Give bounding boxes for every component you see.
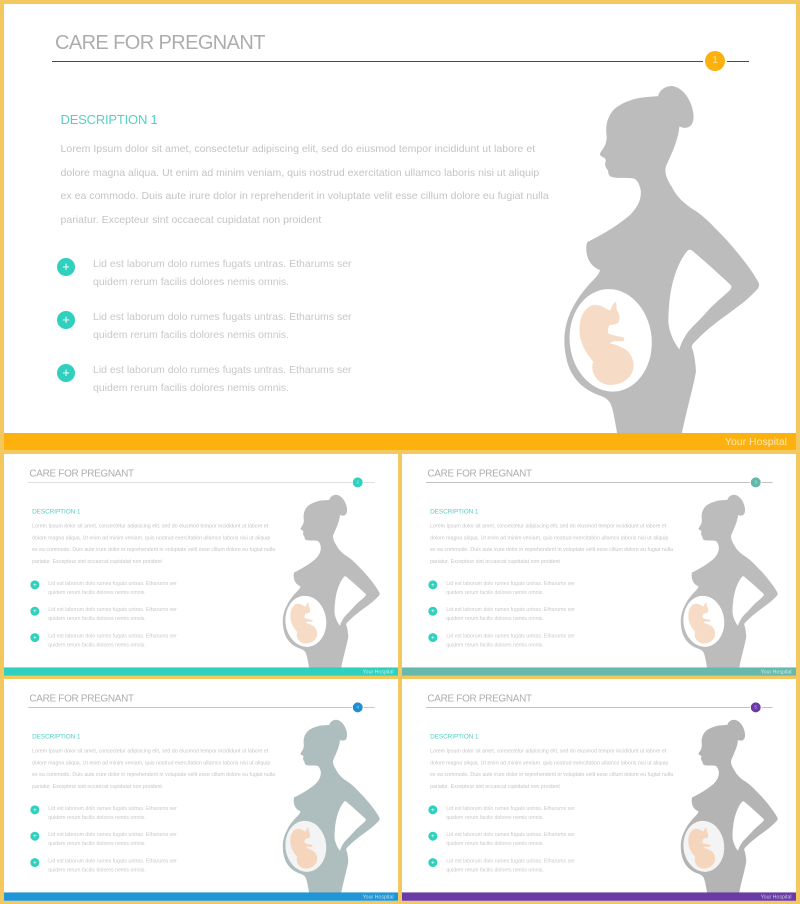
bullet text 3: Lid est laborum dolo rumes fugats untras. Etharums ser <box>93 364 352 376</box>
pregnant silhouette with fetus <box>282 720 380 892</box>
bullet text 2 <box>93 311 352 341</box>
icon: bullet 1: + <box>62 259 70 274</box>
heading: description: DESCRIPTION 1 <box>430 733 478 740</box>
title: CARE FOR PREGNANT <box>55 32 265 54</box>
icon: bullet 1 <box>428 580 437 589</box>
bullet text 2: quidem rerum facilis dolores nemis omnis. <box>48 616 146 622</box>
bullet text 2: Lid est laborum dolo rumes fugats untras. Etharums ser <box>446 832 575 838</box>
panel: sage green theme <box>402 454 796 676</box>
panel: teal theme <box>4 454 398 676</box>
panel: purple theme <box>402 679 796 901</box>
footer bar <box>4 667 398 676</box>
bullet text 3 <box>446 858 575 873</box>
icon: bullet 3 <box>428 858 437 867</box>
bullet text 2 <box>446 607 575 622</box>
icon: bullet 2: + <box>62 312 70 327</box>
bullet text 1 <box>446 580 575 595</box>
bullet text 1: quidem rerum facilis dolores nemis omnis. <box>48 814 146 820</box>
icon: bullet 2 <box>30 607 39 616</box>
title: CARE FOR PREGNANT <box>427 468 532 479</box>
icon: bullet 1 <box>428 805 437 814</box>
footer bar: Your Hospital <box>761 669 792 675</box>
body paragraph: ex ea commodo. Duis aute irure dolor in reprehenderit in voluptate velit esse cillum dolore eu fugiat nulla <box>32 547 275 553</box>
icon: bullet 2 <box>57 311 75 329</box>
footer bar <box>4 892 398 901</box>
body paragraph: Lorem Ipsum dolor sit amet, consectetur adipiscing elit, sed do eiusmod tempor incididunt ut labore et <box>60 143 535 155</box>
number badge <box>703 49 727 73</box>
bullet text 1: quidem rerum facilis dolores nemis omnis. <box>48 589 146 595</box>
bullet text 3: quidem rerum facilis dolores nemis omnis. <box>93 382 289 394</box>
body paragraph: Lorem Ipsum dolor sit amet, consectetur adipiscing elit, sed do eiusmod tempor incididunt ut labore et <box>32 523 268 529</box>
icon: bullet 2 <box>428 832 437 841</box>
pregnant silhouette with fetus <box>680 494 778 668</box>
number badge: 2 <box>356 479 359 485</box>
body paragraph: dolore magna aliqua. Ut enim ad minim veniam, quis nostrud exercitation ullamco laboris nisi ut aliquip <box>32 535 270 541</box>
bullet text 3: quidem rerum facilis dolores nemis omnis. <box>48 867 146 873</box>
number badge <box>750 476 762 488</box>
icon: bullet 3: + <box>33 634 37 641</box>
body paragraph: pariatur. Excepteur sint occaecat cupidatat non proident <box>430 559 560 564</box>
body paragraph: dolore magna aliqua. Ut enim ad minim veniam, quis nostrud exercitation ullamco laboris nisi ut aliquip <box>430 760 668 766</box>
number badge: 3 <box>754 479 757 485</box>
icon: bullet 1: + <box>33 806 37 813</box>
icon: bullet 3: + <box>431 859 435 866</box>
body paragraph: pariatur. Excepteur sint occaecat cupidatat non proident <box>32 784 162 789</box>
icon: bullet 2: + <box>33 832 37 840</box>
bullet text 2: Lid est laborum dolo rumes fugats untras. Etharums ser <box>93 311 352 323</box>
body paragraph: pariatur. Excepteur sint occaecat cupidatat non proident <box>430 784 560 789</box>
body paragraph: dolore magna aliqua. Ut enim ad minim veniam, quis nostrud exercitation ullamco laboris nisi ut aliquip <box>430 535 668 541</box>
header rule <box>426 481 773 484</box>
number badge: 5 <box>754 704 757 710</box>
bullet text 2 <box>48 832 177 847</box>
body paragraph: ex ea commodo. Duis aute irure dolor in reprehenderit in voluptate velit esse cillum dolore eu fugiat nulla <box>60 190 549 202</box>
body paragraph: ex ea commodo. Duis aute irure dolor in reprehenderit in voluptate velit esse cillum dolore eu fugiat nulla <box>430 772 673 778</box>
title: CARE FOR PREGNANT <box>29 468 134 479</box>
number badge <box>352 701 364 713</box>
bullet text 3: Lid est laborum dolo rumes fugats untras. Etharums ser <box>48 858 177 864</box>
icon: bullet 1 <box>30 805 39 814</box>
bullet text 1 <box>48 580 177 595</box>
bullet text 1: quidem rerum facilis dolores nemis omnis. <box>446 814 544 820</box>
bullet text 3 <box>48 633 177 648</box>
bullet text 3 <box>446 633 575 648</box>
header rule <box>28 481 375 484</box>
footer bar: Your Hospital <box>363 669 394 675</box>
bullet text 3: Lid est laborum dolo rumes fugats untras. Etharums ser <box>446 858 575 864</box>
footer bar <box>402 892 796 901</box>
footer bar <box>4 433 796 450</box>
panel: main slide, orange theme <box>4 4 796 450</box>
icon: bullet 2: + <box>431 832 435 840</box>
icon: bullet 1: + <box>33 581 37 588</box>
bullet text 1: quidem rerum facilis dolores nemis omnis. <box>446 589 544 595</box>
heading: description: DESCRIPTION 1 <box>60 112 158 127</box>
bullet text 1: Lid est laborum dolo rumes fugats untras. Etharums ser <box>48 580 177 586</box>
bullet text 2: quidem rerum facilis dolores nemis omnis. <box>48 841 146 847</box>
icon: bullet 3: + <box>431 634 435 641</box>
body paragraph: ex ea commodo. Duis aute irure dolor in reprehenderit in voluptate velit esse cillum dolore eu fugiat nulla <box>32 772 275 778</box>
bullet text 1 <box>93 258 352 288</box>
number badge <box>750 701 762 713</box>
body paragraph <box>32 523 275 564</box>
body paragraph: ex ea commodo. Duis aute irure dolor in reprehenderit in voluptate velit esse cillum dolore eu fugiat nulla <box>430 547 673 553</box>
bullet text 1: Lid est laborum dolo rumes fugats untras. Etharums ser <box>446 805 575 811</box>
bullet text 2: Lid est laborum dolo rumes fugats untras. Etharums ser <box>48 607 177 613</box>
bullet text 2: quidem rerum facilis dolores nemis omnis. <box>446 841 544 847</box>
icon: bullet 1: + <box>431 581 435 588</box>
bullet text 1 <box>446 805 575 820</box>
body paragraph: dolore magna aliqua. Ut enim ad minim veniam, quis nostrud exercitation ullamco laboris nisi ut aliquip <box>32 760 270 766</box>
bullet text 2: Lid est laborum dolo rumes fugats untras. Etharums ser <box>446 607 575 613</box>
bullet text 3: quidem rerum facilis dolores nemis omnis. <box>48 642 146 648</box>
body paragraph <box>430 523 673 564</box>
body paragraph <box>430 748 673 789</box>
body paragraph: Lorem Ipsum dolor sit amet, consectetur adipiscing elit, sed do eiusmod tempor incididunt ut labore et <box>430 523 666 529</box>
bullet text 1: quidem rerum facilis dolores nemis omnis. <box>93 276 289 288</box>
title: CARE FOR PREGNANT <box>29 693 134 704</box>
bullet text 2 <box>446 832 575 847</box>
icon: bullet 3: + <box>33 859 37 866</box>
bullet text 2: quidem rerum facilis dolores nemis omnis. <box>446 616 544 622</box>
body paragraph: pariatur. Excepteur sint occaecat cupidatat non proident <box>60 214 321 226</box>
bullet text 2 <box>48 607 177 622</box>
footer bar <box>402 667 796 676</box>
icon: bullet 3: + <box>62 365 70 380</box>
bullet text 3: quidem rerum facilis dolores nemis omnis. <box>446 867 544 873</box>
icon: bullet 2 <box>428 607 437 616</box>
body paragraph: Lorem Ipsum dolor sit amet, consectetur adipiscing elit, sed do eiusmod tempor incididunt ut labore et <box>32 748 268 754</box>
icon: bullet 2: + <box>431 607 435 615</box>
bullet text 2: Lid est laborum dolo rumes fugats untras. Etharums ser <box>48 832 177 838</box>
body paragraph: Lorem Ipsum dolor sit amet, consectetur adipiscing elit, sed do eiusmod tempor incididunt ut labore et <box>430 748 666 754</box>
heading: description: DESCRIPTION 1 <box>430 508 478 515</box>
body paragraph <box>60 143 549 226</box>
icon: bullet 3 <box>428 633 437 642</box>
pregnant silhouette with fetus <box>680 720 778 892</box>
icon: bullet 2: + <box>33 607 37 615</box>
bullet text 3 <box>48 858 177 873</box>
icon: bullet 3 <box>30 858 39 867</box>
body paragraph: dolore magna aliqua. Ut enim ad minim veniam, quis nostrud exercitation ullamco laboris nisi ut aliquip <box>60 167 539 179</box>
icon: bullet 1 <box>57 258 75 276</box>
header rule <box>52 60 749 62</box>
icon: bullet 2 <box>30 832 39 841</box>
bullet text 3: Lid est laborum dolo rumes fugats untras. Etharums ser <box>446 633 575 639</box>
panel: blue theme <box>4 679 398 901</box>
bullet text 3: quidem rerum facilis dolores nemis omnis. <box>446 642 544 648</box>
number badge <box>352 476 364 488</box>
bullet text 1: Lid est laborum dolo rumes fugats untras. Etharums ser <box>93 258 352 270</box>
number badge: 4 <box>356 704 359 710</box>
bullet text 1: Lid est laborum dolo rumes fugats untras. Etharums ser <box>446 580 575 586</box>
heading: description: DESCRIPTION 1 <box>32 508 80 515</box>
footer bar: Your Hospital <box>363 894 394 900</box>
bullet text 3 <box>93 364 352 394</box>
pregnant silhouette with fetus <box>282 494 380 668</box>
body paragraph <box>32 748 275 789</box>
title: CARE FOR PREGNANT <box>427 693 532 704</box>
pregnant silhouette with fetus <box>564 86 759 433</box>
icon: bullet 1 <box>30 580 39 589</box>
header rule <box>426 706 773 709</box>
bullet text 2: quidem rerum facilis dolores nemis omnis. <box>93 329 289 341</box>
footer bar: Your Hospital <box>725 436 787 448</box>
icon: bullet 3 <box>57 364 75 382</box>
header rule <box>28 706 375 709</box>
icon: bullet 3 <box>30 633 39 642</box>
footer bar: Your Hospital <box>761 894 792 900</box>
bullet text 3: Lid est laborum dolo rumes fugats untras. Etharums ser <box>48 633 177 639</box>
number badge: 1 <box>712 55 718 66</box>
body paragraph: pariatur. Excepteur sint occaecat cupidatat non proident <box>32 559 162 564</box>
icon: bullet 1: + <box>431 806 435 813</box>
bullet text 1 <box>48 805 177 820</box>
bullet text 1: Lid est laborum dolo rumes fugats untras. Etharums ser <box>48 805 177 811</box>
heading: description: DESCRIPTION 1 <box>32 733 80 740</box>
